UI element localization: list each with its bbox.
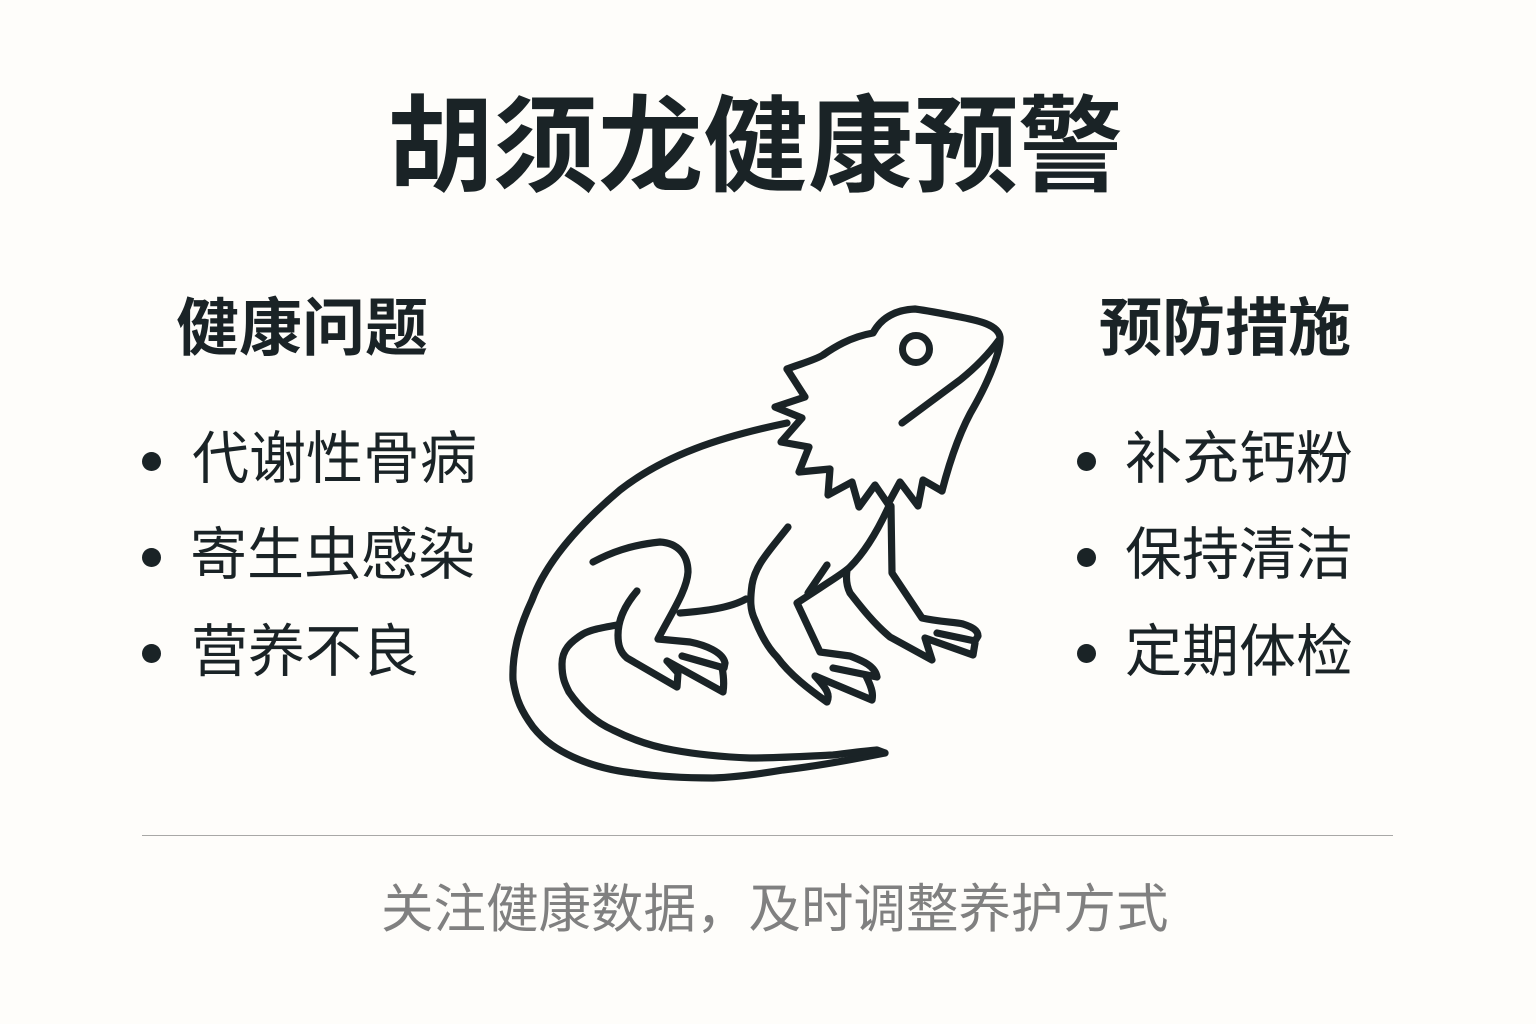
footer note: 关注健康数据，及时调整养护方式 xyxy=(381,880,1169,939)
list item: regular checkup: 定期体检 xyxy=(1125,620,1353,684)
list item: malnutrition: 营养不良 xyxy=(191,620,419,684)
list item: metabolic bone disease: 代谢性骨病 xyxy=(192,427,477,491)
heading: prevention: 预防措施 xyxy=(1099,294,1351,364)
frill xyxy=(775,369,942,507)
list item: calcium supplement: 补充钙粉 xyxy=(1125,427,1353,491)
head outline xyxy=(787,309,1000,491)
belly xyxy=(680,599,746,613)
list item: parasite infection: 寄生虫感染 xyxy=(190,523,475,587)
middle leg xyxy=(751,527,872,702)
mouth line xyxy=(902,340,999,423)
tail inner xyxy=(562,625,885,758)
hind leg xyxy=(593,542,725,668)
panel: health problems xyxy=(142,294,477,684)
title: 胡须龙健康预警 xyxy=(388,89,1123,206)
list item: keep clean: 保持清洁 xyxy=(1125,523,1353,587)
eye xyxy=(902,336,930,362)
back and tail outer xyxy=(513,423,885,778)
heading: health problems: 健康问题 xyxy=(176,294,428,364)
panel: prevention xyxy=(1077,294,1353,684)
front claw spur xyxy=(808,565,827,593)
right leg xyxy=(891,506,978,641)
